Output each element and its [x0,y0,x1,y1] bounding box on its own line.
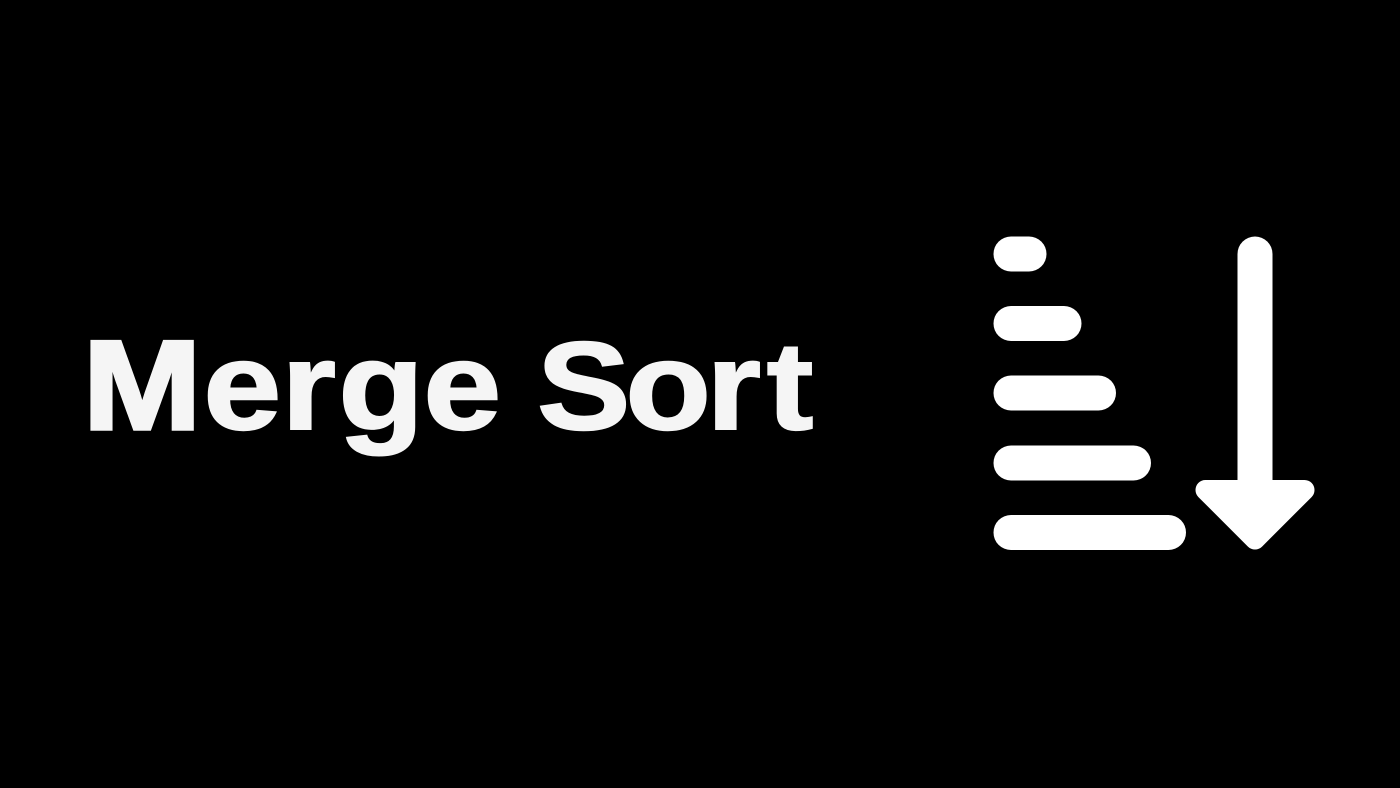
icon: bar 1 [994,236,1046,272]
icon: bar 4 [994,446,1151,480]
icon: bar 2 [994,306,1082,341]
icon: bar 5 [994,515,1186,550]
icon: bar 3 [994,376,1116,410]
arrow: down [1206,236,1304,540]
icon: sort descending [994,236,1304,550]
title: M [83,314,201,456]
title: erge Sort [203,317,813,456]
